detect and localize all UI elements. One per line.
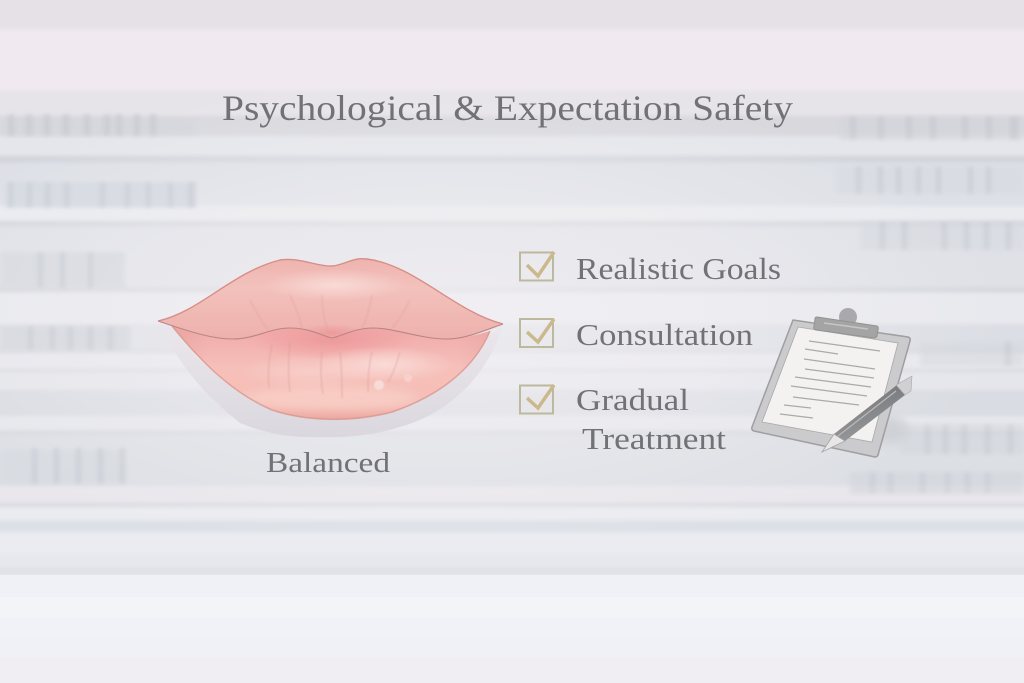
item: gradual treatment: Treatment [582,421,726,456]
lighter central wash [0,90,1024,530]
upper lip [158,259,503,342]
lip shadow [160,323,502,437]
item: consultation [520,317,754,352]
mouth line [158,321,503,339]
item: gradual treatment: Gradual [576,382,689,417]
item: consultation: Consultation [576,317,754,352]
label: balanced: Balanced [266,448,390,479]
item: gradual treatment [520,382,726,456]
title: Psychological & Expectation Safety [222,88,793,128]
icon: clipboard and pen [752,308,912,457]
checklist [520,251,781,456]
item: realistic goals: Realistic Goals [576,251,781,286]
illustration: lips [158,259,503,437]
lower lip [172,326,491,420]
